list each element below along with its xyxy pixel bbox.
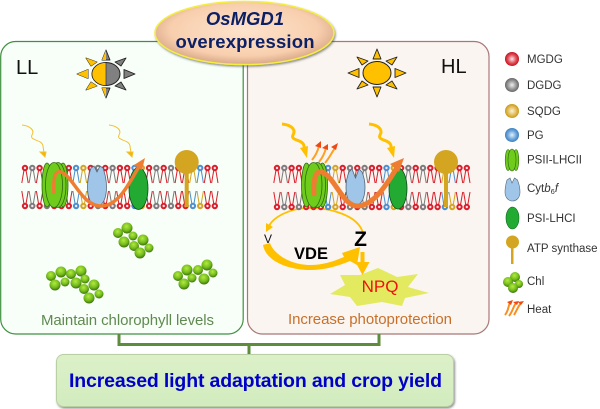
legend: ATP synthase: ATP synthase	[527, 243, 598, 255]
legend: Heat: Heat	[527, 304, 552, 316]
icon: PSII-LHCII	[42, 162, 68, 208]
connector	[119, 334, 379, 354]
arrows: strong light	[282, 124, 395, 158]
result text: Increased light adaptation and crop yield	[69, 370, 442, 392]
NPQ burst	[330, 268, 429, 306]
membrane: high light	[274, 150, 470, 209]
HL heading: HL	[441, 56, 467, 78]
panel: low light	[1, 42, 243, 334]
legend: PSI-LHCI	[506, 207, 576, 229]
icon: PSI-LHCI	[129, 168, 148, 210]
legend: PSII-LHCII: PSII-LHCII	[527, 154, 582, 166]
caption: low light: Maintain chlorophyll levels	[41, 312, 214, 329]
legend: MGDG	[505, 52, 563, 66]
icon: Cytb6f	[88, 166, 106, 206]
legend: DGDG: DGDG	[527, 80, 562, 92]
legend: Cytb6f: 6	[551, 187, 555, 196]
icon: ATP synthase	[175, 150, 199, 207]
legend: Cytb6f	[505, 178, 560, 201]
chlorophyll clusters	[46, 222, 218, 304]
label: Z: Z	[354, 228, 367, 251]
legend: ATP synthase	[506, 236, 598, 264]
arrow: electron path	[314, 158, 404, 206]
legend: Cytb6f: f	[555, 183, 560, 195]
legend: Chl: Chl	[527, 276, 544, 288]
label: VDE: VDE	[294, 245, 328, 263]
icon: Cytb6f	[346, 169, 365, 205]
arrows: weak light	[22, 125, 133, 157]
icon: bright sun	[348, 49, 406, 97]
panel: high light	[248, 42, 489, 334]
result box	[56, 354, 454, 406]
legend: DGDG	[505, 78, 562, 92]
icon: ATP synthase	[434, 150, 458, 207]
legend: MGDG: MGDG	[527, 54, 563, 66]
title: gene: OsMGD1	[206, 8, 284, 29]
legend: SQDG	[505, 104, 561, 118]
legend: PG: PG	[527, 130, 544, 142]
LL heading: LL	[16, 57, 38, 79]
legend	[503, 52, 598, 316]
VDE cycle	[263, 208, 367, 270]
icon: PSII-LHCII	[302, 162, 328, 208]
title: overexpression: overexpression	[176, 31, 314, 52]
legend: PSI-LHCI: PSI-LHCI	[527, 213, 576, 225]
arrow: Z to NPQ	[356, 252, 370, 275]
legend: SQDG: SQDG	[527, 106, 561, 118]
arrow: electron path	[54, 158, 145, 206]
title oval	[155, 2, 334, 64]
label: V: V	[264, 232, 272, 246]
membrane: low light	[22, 150, 218, 210]
legend: PSII-LHCII	[505, 149, 582, 171]
caption: high light: Increase photoprotection	[288, 311, 452, 328]
NPQ burst: NPQ	[362, 277, 398, 296]
arrow: V to Z	[263, 243, 360, 270]
icon: half-dim sun	[77, 50, 135, 98]
legend: Cytb6f: Cytb	[527, 183, 551, 195]
legend: Chl	[503, 272, 544, 293]
icon: PSI-LHCI	[389, 168, 407, 209]
arrow: Z to V	[266, 208, 363, 233]
legend: PG	[505, 128, 544, 142]
legend: Heat	[505, 300, 552, 316]
icon: heat arrows	[312, 141, 338, 163]
